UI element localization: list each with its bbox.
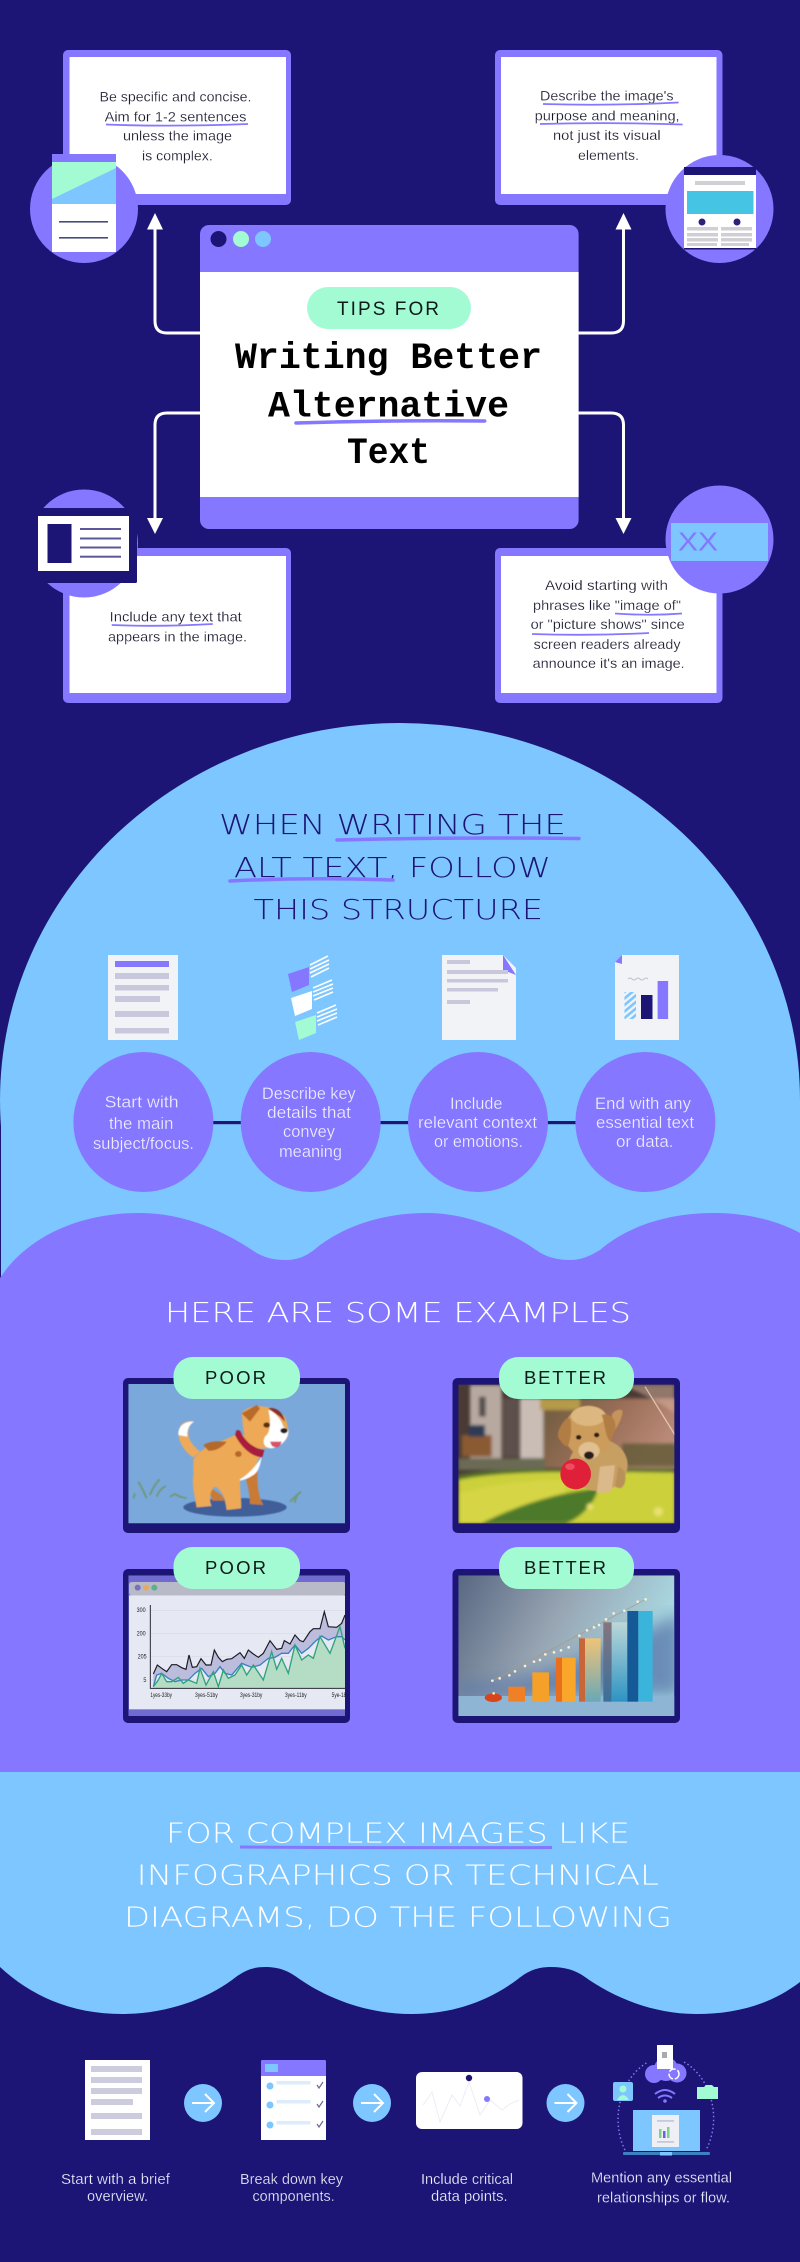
panel: tip card avoid phrases: [495, 548, 722, 703]
image: cluttered line chart: 3yes-51by: [195, 1692, 218, 1699]
step: essential text: or data.: [616, 1133, 674, 1151]
text: purpose and meaning: [535, 88, 680, 163]
pill: tips for: TIPS FOR: [337, 299, 439, 320]
heading: when writing the alt text: WHEN WRITING THE: [219, 808, 566, 841]
icon: key details list: [288, 956, 337, 1040]
pill: poor: POOR: [205, 1367, 266, 1388]
step: context or emotions: [408, 1052, 548, 1192]
example: poor pixel dog: [123, 1357, 350, 1533]
text: specific and concise: Aim for 1-2 sentences: [105, 109, 246, 125]
image: cluttered line chart: 5ye-18: [332, 1692, 347, 1699]
text: avoid phrases: announce it's an image.: [533, 655, 685, 671]
image: cluttered line chart: 300: [137, 1607, 146, 1614]
heading: when writing the alt text: ALT TEXT, FOLLOW: [234, 851, 551, 884]
image: cluttered line chart: 3yes-11by: [285, 1692, 307, 1699]
title: Text: [347, 433, 430, 475]
step: key details: details that: [267, 1104, 351, 1122]
pill: tips for: [307, 287, 471, 329]
arrow: step one to two: [184, 2084, 222, 2122]
caption: critical data points: Include critical: [421, 2171, 513, 2188]
title: Writing Better: [235, 338, 542, 380]
icon: text document: [108, 955, 178, 1040]
caption: brief overview: Start with a brief: [61, 2171, 171, 2188]
text: avoid phrases: [531, 577, 685, 671]
caption: key components: [240, 2171, 343, 2205]
arrow: step two to three: [353, 2084, 391, 2122]
pill: better: BETTER: [524, 1557, 606, 1578]
pill: poor: [174, 1547, 300, 1589]
pill: better: [499, 1357, 634, 1399]
pill: poor: POOR: [205, 1557, 266, 1578]
text: avoid phrases: Avoid starting with: [545, 577, 668, 593]
text: specific and concise: is complex.: [142, 148, 213, 164]
image: puppy with red ball: [458, 1384, 678, 1524]
icon: web page in circle: [666, 155, 774, 263]
image: pixel art dog: [128, 1384, 345, 1523]
icon: data points chart: [416, 2072, 522, 2129]
image: cluttered line chart: 5: [143, 1677, 147, 1684]
caption: brief overview: [61, 2171, 171, 2205]
step: key details: Describe key: [262, 1085, 356, 1103]
image: cluttered line chart: 205: [138, 1654, 147, 1661]
heading: when writing the alt text: [219, 808, 566, 926]
heading: when writing the alt text: THIS STRUCTURE: [254, 893, 543, 926]
title: [235, 338, 542, 475]
step: essential text: essential text: [596, 1114, 694, 1132]
heading: for complex images: [124, 1817, 672, 1934]
icon: context document: [442, 955, 516, 1040]
connector line between steps: [200, 1121, 600, 1124]
icon: components checklist: [261, 2060, 326, 2140]
step: key details: meaning: [279, 1143, 342, 1161]
step: essential text: [575, 1052, 715, 1192]
text: purpose and meaning: Describe the image's: [540, 88, 674, 104]
heading: for complex images: INFOGRAPHICS OR TECHNICAL: [137, 1859, 659, 1892]
arrow: title to top-left card: [147, 213, 200, 333]
step: main subject: Start with: [105, 1094, 179, 1112]
title: Alternative: [268, 386, 509, 428]
text: purpose and meaning: purpose and meaning,: [535, 108, 680, 124]
text: include text: [108, 609, 247, 645]
panel: central title window: [200, 225, 579, 529]
pill: poor: [174, 1357, 300, 1399]
underlines: phrases: [532, 614, 682, 635]
icon: data document: [615, 955, 679, 1040]
icon: overview document: [85, 2060, 150, 2140]
panel: complex images background: [0, 1772, 800, 2014]
panel: purple examples background: [0, 1213, 800, 1772]
panel: structure dome background: [0, 723, 800, 1477]
caption: relationships or flow: relationships or flow.: [597, 2190, 730, 2207]
underline: alternative: [296, 421, 485, 423]
image: rising 3D bars: [458, 1575, 682, 1716]
text: include text: Include any text that: [110, 609, 242, 625]
panel: tip card specific and concise: [63, 50, 291, 205]
caption: relationships or flow: [591, 2170, 732, 2207]
caption: critical data points: [421, 2171, 513, 2205]
text: purpose and meaning: not just its visual: [553, 127, 661, 143]
text: specific and concise: [100, 89, 252, 164]
example: poor cluttered chart: [123, 1547, 350, 1723]
example: better puppy photo: [452, 1357, 680, 1533]
caption: key components: Break down key: [240, 2171, 343, 2188]
underlines: purpose and meaning: [540, 102, 683, 124]
arrow: title to top-right card: [578, 213, 632, 333]
underline: include any text: [112, 624, 213, 626]
pill: better: BETTER: [524, 1367, 606, 1388]
example: better 3D bar chart: [452, 1547, 682, 1723]
image: cluttered line chart: 3yes-31by: [240, 1692, 263, 1699]
step: context or emotions: Include: [450, 1095, 502, 1113]
step: context or emotions: or emotions.: [434, 1133, 523, 1151]
icon: text layout in circle: [30, 490, 138, 598]
caption: key components: components.: [252, 2188, 335, 2205]
text: specific and concise: unless the image: [123, 128, 232, 144]
image: cluttered line chart: 200: [137, 1630, 146, 1637]
image: cluttered line chart: [128, 1575, 347, 1716]
step: main subject: [73, 1052, 213, 1192]
arrow: title to bottom-right card: [578, 413, 632, 534]
panel: tip card purpose and meaning: [495, 50, 722, 205]
caption: critical data points: data points.: [431, 2188, 508, 2205]
heading: for complex images: DIAGRAMS, DO THE FOLLOWING: [124, 1901, 672, 1934]
text: avoid phrases: or "picture shows" since: [531, 616, 685, 632]
text: purpose and meaning: elements.: [578, 147, 639, 163]
text: include text: appears in the image.: [108, 629, 247, 645]
step: main subject: subject/focus.: [93, 1135, 194, 1153]
step: main subject: the main: [109, 1115, 174, 1133]
window dots: [210, 231, 271, 247]
step: context or emotions: relevant context: [418, 1114, 537, 1132]
text: specific and concise: Be specific and concise.: [100, 89, 252, 105]
heading: examples: HERE ARE SOME EXAMPLES: [165, 1296, 631, 1329]
panel: tip card include text: [63, 548, 291, 703]
underline: 1-2 sentences: [106, 124, 248, 126]
underlines: writing the / alt text: [230, 838, 579, 881]
arrow: title to bottom-left card: [147, 413, 200, 534]
caption: brief overview: overview.: [87, 2188, 148, 2205]
icon: connected devices: [613, 2045, 718, 2156]
icon: XX box in circle: XX: [678, 526, 718, 556]
text: avoid phrases: screen readers already: [534, 636, 681, 652]
caption: relationships or flow: Mention any essential: [591, 2170, 732, 2187]
arrow: step three to four: [546, 2084, 584, 2122]
heading: for complex images: FOR COMPLEX IMAGES LIKE: [166, 1817, 630, 1850]
step: key details: convey: [283, 1123, 336, 1141]
image: cluttered line chart: 1yes-33by: [150, 1692, 173, 1699]
text: avoid phrases: phrases like "image of": [533, 597, 681, 613]
icon: image card in circle: [30, 154, 138, 263]
step: essential text: End with any: [595, 1095, 692, 1113]
pill: better: [499, 1547, 634, 1589]
step: key details: [241, 1052, 381, 1192]
icon: XX box in circle: [666, 486, 774, 594]
underline: complex images: [240, 1846, 552, 1849]
